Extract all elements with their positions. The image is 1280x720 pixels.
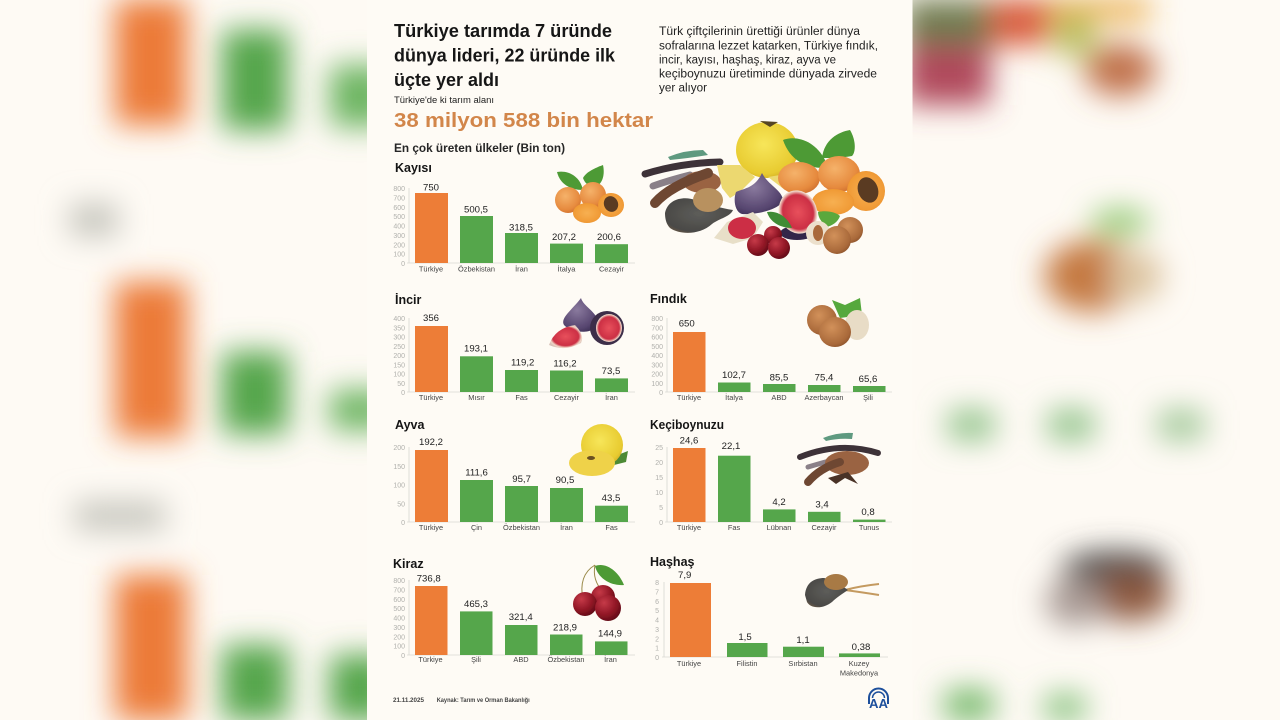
y axis labels: 200 xyxy=(393,353,405,360)
value labels: 22,1 xyxy=(722,441,740,452)
y axis labels xyxy=(393,316,405,397)
value labels xyxy=(678,570,870,653)
y axis labels: 6 xyxy=(655,599,659,606)
y axis labels: 800 xyxy=(393,186,405,193)
y axis labels: 800 xyxy=(393,578,405,585)
intro paragraph: incir, kayısı, haşhaş, kiraz, ayva ve xyxy=(659,54,836,66)
title: Türkiye tarımda 7 üründe xyxy=(394,21,612,41)
y axis labels: 8 xyxy=(655,580,659,587)
y axis labels: 150 xyxy=(393,464,405,471)
country labels: Fas xyxy=(605,523,618,532)
country labels: İran xyxy=(605,393,618,402)
intro paragraph: Türk çiftçilerinin ürettiği ürünler dünya xyxy=(659,26,861,38)
y axis labels: 500 xyxy=(393,214,405,221)
farm area subtitle: Türkiye'de ki tarım alanı xyxy=(394,95,494,105)
intro paragraph: keçiboynuzu üretiminde dünyada zirvede xyxy=(659,68,877,80)
value labels: 193,1 xyxy=(464,344,488,355)
y axis labels: 300 xyxy=(393,233,405,240)
heading: İncir: İncir xyxy=(395,292,422,307)
y axis labels: 50 xyxy=(397,381,405,388)
country labels: Türkiye xyxy=(419,523,443,532)
axes xyxy=(665,447,892,522)
footer date: 21.11.2025 xyxy=(393,697,425,704)
y axis labels xyxy=(655,580,659,662)
value labels: 0,38 xyxy=(852,642,870,653)
axes xyxy=(407,318,635,392)
illustration: fruit cluster xyxy=(645,121,885,259)
y axis labels: 7 xyxy=(655,589,659,596)
value labels: 465,3 xyxy=(464,599,488,610)
title: dünya lideri, 22 üründe ilk xyxy=(394,46,616,66)
y axis labels: 0 xyxy=(401,653,405,660)
country labels xyxy=(418,655,617,664)
country labels: İtalya xyxy=(725,393,744,402)
chart: Kayısı xyxy=(393,161,635,274)
y axis labels xyxy=(393,186,405,268)
y axis labels: 5 xyxy=(659,505,663,512)
country labels: Fas xyxy=(515,393,528,402)
country labels: Makedonya xyxy=(840,669,879,678)
y axis labels: 25 xyxy=(655,445,663,452)
chart: Keçiboynuzu xyxy=(650,418,892,532)
value labels: 1,5 xyxy=(738,632,752,643)
country labels xyxy=(677,523,879,532)
bars xyxy=(670,583,880,657)
value labels: 650 xyxy=(679,319,695,330)
country labels: İran xyxy=(560,523,573,532)
value labels xyxy=(679,319,877,385)
y axis labels: 200 xyxy=(393,242,405,249)
country labels: ABD xyxy=(771,393,787,402)
country labels: Türkiye xyxy=(677,523,701,532)
intro paragraph: sofralarına lezzet katarken, Türkiye fındık, xyxy=(659,40,878,52)
y axis labels: 100 xyxy=(393,644,405,651)
y axis labels xyxy=(651,316,663,397)
country labels: Cezayir xyxy=(554,393,580,402)
y axis labels: 600 xyxy=(393,205,405,212)
axes xyxy=(407,188,635,263)
y axis labels: 0 xyxy=(401,261,405,268)
axes xyxy=(407,447,635,522)
title: üçte yer aldı xyxy=(394,70,499,90)
y axis labels xyxy=(655,445,663,527)
chart: Haşhaş xyxy=(650,555,888,678)
value labels: 500,5 xyxy=(464,205,488,216)
y axis labels: 350 xyxy=(393,325,405,332)
country labels xyxy=(677,659,879,678)
heading: Fındık: Fındık xyxy=(650,292,687,306)
heading: Kayısı: Kayısı xyxy=(395,161,432,175)
country labels: Türkiye xyxy=(419,393,443,402)
value labels: 218,9 xyxy=(553,623,577,634)
y axis labels: 400 xyxy=(393,316,405,323)
country labels: Cezayir xyxy=(599,264,625,274)
country labels: Türkiye xyxy=(419,264,443,274)
y axis labels: 500 xyxy=(393,606,405,613)
footer source: Kaynak: Tarım ve Orman Bakanlığı xyxy=(437,697,530,704)
country labels: Tunus xyxy=(859,523,879,532)
value labels xyxy=(417,574,622,640)
value labels: 73,5 xyxy=(602,366,620,377)
y axis labels: 600 xyxy=(651,334,663,342)
y axis labels: 4 xyxy=(655,618,659,624)
section heading: En çok üreten ülkeler (Bin ton) xyxy=(394,141,565,155)
country labels: İran xyxy=(515,264,528,274)
intro paragraph xyxy=(659,26,878,94)
chart: İncir xyxy=(393,292,635,402)
icon: figs xyxy=(549,298,624,348)
y axis labels: 10 xyxy=(655,490,663,497)
heading: Haşhaş: Haşhaş xyxy=(650,555,695,569)
icon: apricots xyxy=(555,165,624,223)
y axis labels: 600 xyxy=(393,597,405,604)
country labels xyxy=(419,393,618,402)
y axis labels: 250 xyxy=(393,344,405,351)
y axis labels: 0 xyxy=(655,655,659,662)
y axis labels: 100 xyxy=(393,372,405,378)
icon: cherries xyxy=(573,565,624,621)
intro paragraph: yer alıyor xyxy=(659,82,707,94)
country labels: Türkiye xyxy=(418,655,443,664)
heading: Ayva: Ayva xyxy=(395,418,425,432)
chart: Kiraz xyxy=(393,557,635,664)
value labels: 116,2 xyxy=(553,359,577,370)
y axis labels: 50 xyxy=(397,501,405,508)
value labels: 318,5 xyxy=(509,223,533,234)
logo: Anadolu Agency: AA xyxy=(869,696,889,711)
value labels: 119,2 xyxy=(511,358,534,369)
value labels: 0,8 xyxy=(861,507,875,518)
y axis labels: 500 xyxy=(651,344,663,351)
country labels xyxy=(419,523,618,532)
value labels: 85,5 xyxy=(770,373,788,384)
country labels: Özbekistan xyxy=(503,523,540,532)
title xyxy=(394,21,616,90)
bars xyxy=(415,326,628,392)
y axis labels: 700 xyxy=(393,195,405,202)
country labels: Fas xyxy=(728,523,740,532)
y axis labels: 400 xyxy=(393,224,405,230)
y axis labels: 400 xyxy=(651,353,663,360)
value labels: 43,5 xyxy=(602,493,620,504)
bars xyxy=(415,586,628,655)
value labels: 7,9 xyxy=(678,570,691,581)
country labels: Kuzey xyxy=(849,659,870,668)
country labels: Çin xyxy=(471,523,482,532)
value labels: 65,6 xyxy=(859,374,877,385)
y axis labels: 700 xyxy=(393,587,405,594)
value labels xyxy=(419,437,620,504)
country labels: Türkiye xyxy=(677,659,701,668)
country labels xyxy=(419,264,625,274)
logo: Anadolu Agency xyxy=(869,688,889,711)
value labels: 200,6 xyxy=(597,232,621,243)
axes xyxy=(407,580,635,655)
value labels: 111,6 xyxy=(465,468,488,479)
y axis labels: 0 xyxy=(659,390,663,397)
country labels: Türkiye xyxy=(677,393,701,402)
icon: carob xyxy=(800,433,878,484)
value labels: 75,4 xyxy=(815,373,834,384)
y axis labels: 400 xyxy=(393,616,405,622)
icon: hazelnuts xyxy=(807,298,869,347)
icon: quince xyxy=(569,424,628,476)
y axis labels: 200 xyxy=(651,372,663,378)
y axis labels: 0 xyxy=(659,520,663,527)
y axis labels: 800 xyxy=(651,316,663,323)
country labels: Mısır xyxy=(468,393,485,402)
value labels: 736,8 xyxy=(417,574,441,585)
value labels: 192,2 xyxy=(419,437,443,448)
country labels: İtalya xyxy=(558,264,576,274)
value labels: 24,6 xyxy=(680,436,698,447)
value labels: 95,7 xyxy=(512,474,531,485)
country labels: İran xyxy=(604,655,617,664)
country labels: Özbekistan xyxy=(548,655,584,664)
axes xyxy=(662,582,888,657)
value labels: 102,7 xyxy=(722,370,746,381)
axes xyxy=(665,318,892,392)
value labels: 750 xyxy=(423,182,439,194)
y axis labels: 200 xyxy=(393,634,405,641)
y axis labels: 700 xyxy=(651,325,663,332)
main infographic panel xyxy=(367,0,912,720)
value labels: 4,2 xyxy=(772,497,786,508)
value labels: 3,4 xyxy=(815,500,829,511)
country labels: Şili xyxy=(471,655,481,664)
country labels: Azerbaycan xyxy=(804,393,844,402)
y axis labels: 5 xyxy=(655,608,659,615)
chart: Fındık xyxy=(650,292,892,402)
y axis labels: 20 xyxy=(655,460,663,467)
y axis labels: 150 xyxy=(393,362,405,369)
value labels xyxy=(423,182,621,243)
y axis labels: 300 xyxy=(393,625,405,632)
value labels: 144,9 xyxy=(598,629,622,640)
y axis labels: 0 xyxy=(401,520,405,527)
icon: poppy seeds spoon xyxy=(805,574,879,607)
y axis labels: 3 xyxy=(655,627,659,634)
y axis labels: 100 xyxy=(651,381,663,388)
country labels: Özbekistan xyxy=(458,264,495,274)
value labels: 207,2 xyxy=(552,232,576,243)
country labels: Sırbistan xyxy=(788,659,818,668)
country labels: Şili xyxy=(863,393,873,402)
farm area figure: 38 milyon 588 bin hektar xyxy=(394,109,653,132)
country labels: Lübnan xyxy=(767,523,791,532)
y axis labels: 300 xyxy=(651,362,663,369)
y axis labels: 100 xyxy=(393,252,405,259)
value labels xyxy=(423,313,620,377)
value labels: 356 xyxy=(423,313,439,324)
bars xyxy=(415,193,628,263)
y axis labels xyxy=(393,445,405,527)
y axis labels: 15 xyxy=(655,475,663,482)
y axis labels: 200 xyxy=(393,445,405,452)
y axis labels: 0 xyxy=(401,390,405,397)
country labels: Cezayir xyxy=(811,523,837,532)
value labels: 1,1 xyxy=(796,635,810,646)
bars xyxy=(673,332,886,392)
value labels: 321,4 xyxy=(509,612,533,623)
value labels xyxy=(680,436,875,518)
country labels xyxy=(677,393,873,402)
y axis labels: 2 xyxy=(655,636,659,643)
heading: Kiraz: Kiraz xyxy=(393,557,424,571)
y axis labels: 300 xyxy=(393,334,405,342)
y axis labels xyxy=(393,578,405,660)
y axis labels: 100 xyxy=(393,482,405,490)
y axis labels: 1 xyxy=(655,646,659,653)
heading: Keçiboynuzu: Keçiboynuzu xyxy=(650,418,724,432)
country labels: Filistin xyxy=(737,659,757,668)
country labels: ABD xyxy=(513,655,529,664)
bars xyxy=(673,448,886,522)
chart: Ayva xyxy=(393,418,635,532)
bars xyxy=(415,450,628,522)
value labels: 90,5 xyxy=(556,475,574,486)
